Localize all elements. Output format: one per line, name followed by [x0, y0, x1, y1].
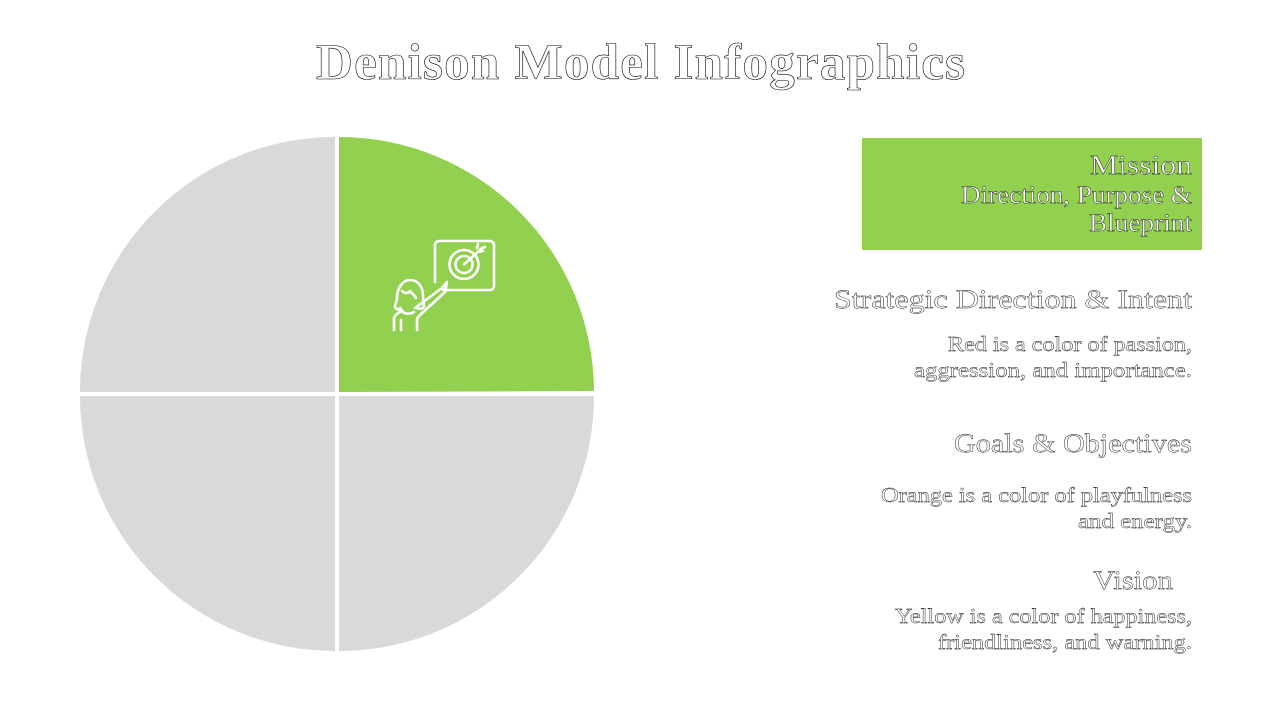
segment: vision (top left) [80, 137, 335, 392]
text: vision description: friendliness, and warning. [938, 630, 1192, 654]
text: vision description: Yellow is a color of happiness, [895, 604, 1192, 628]
text: goals description [881, 483, 1192, 533]
text: goals description: and energy. [1078, 509, 1192, 533]
icon: person pointing at target [394, 241, 494, 330]
panel: mission [862, 138, 1202, 250]
segment: goals (bottom left) [80, 396, 335, 651]
text: strategic description: aggression, and importance. [914, 358, 1192, 382]
text: goals description: Orange is a color of playfulness [881, 483, 1192, 507]
text: strategic description [914, 332, 1192, 382]
heading: strategic direction: Strategic Direction & Intent [834, 285, 1193, 314]
block: strategic direction [834, 285, 1193, 382]
heading: mission: Mission [1090, 150, 1193, 180]
block: goals [881, 429, 1192, 533]
text: mission description: Direction, Purpose & [961, 182, 1192, 209]
pie chart [80, 137, 594, 651]
segment: mission (top right) [339, 137, 594, 392]
text: vision description [895, 604, 1192, 654]
text: mission description: Blueprint [1089, 210, 1192, 237]
segment: strategic direction (bottom right) [339, 396, 594, 651]
text: strategic description: Red is a color of passion, [948, 332, 1192, 356]
heading: vision: Vision [1093, 566, 1173, 595]
title: Denison Model Infographics [316, 35, 965, 91]
text: mission description [961, 182, 1192, 237]
block: vision [895, 566, 1192, 654]
heading: goals: Goals & Objectives [954, 429, 1192, 458]
